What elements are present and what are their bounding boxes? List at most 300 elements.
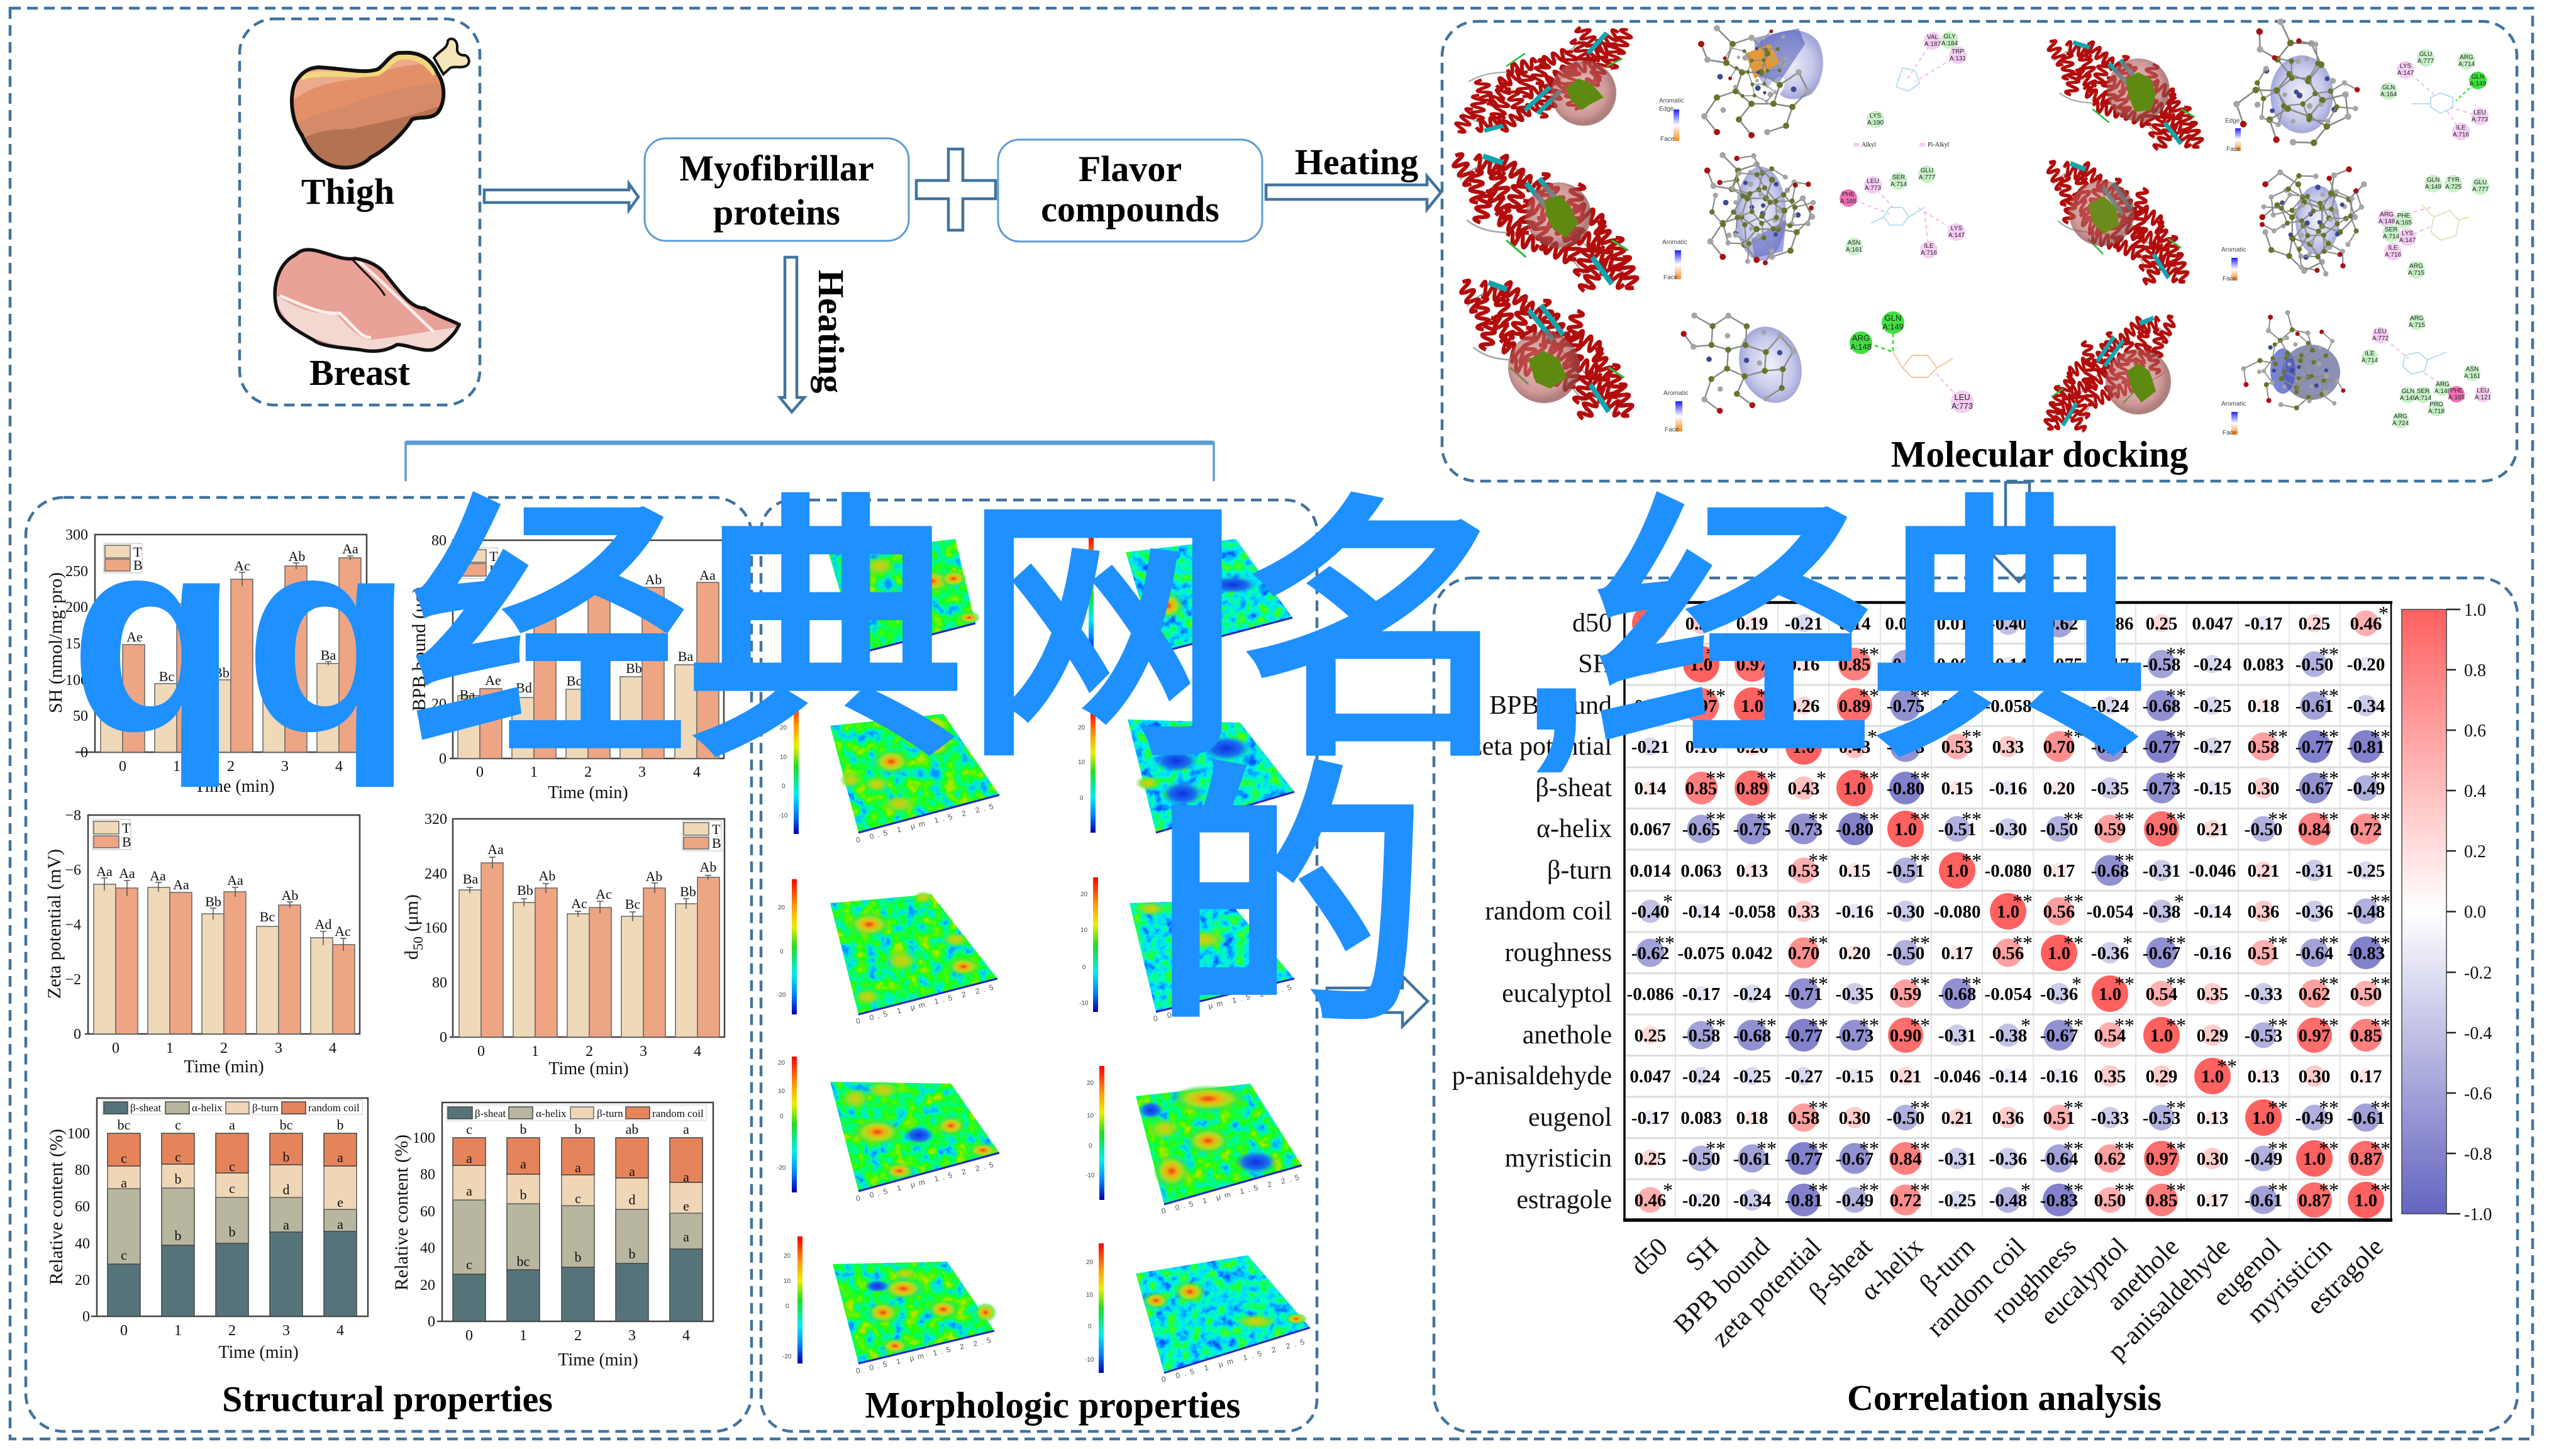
chart: breast secondary structure: 2 bbox=[574, 1328, 582, 1344]
correlation matrix: 1.0 bbox=[1792, 737, 1815, 757]
colour bar legend: 0.6 bbox=[2464, 721, 2486, 741]
correlation matrix: -0.058 bbox=[1985, 696, 2031, 716]
chart: BPB bound: Bb bbox=[626, 660, 642, 676]
correlation matrix: 0.53 bbox=[1941, 737, 1973, 757]
correlation matrix: 0.62 bbox=[2299, 984, 2330, 1004]
correlation matrix: 0.047 bbox=[2192, 614, 2233, 634]
correlation matrix: 0.97 bbox=[2299, 1026, 2330, 1046]
correlation matrix: ** bbox=[2370, 890, 2390, 913]
chart: d50: 240 bbox=[425, 866, 447, 882]
correlation matrix: ** bbox=[2319, 725, 2339, 748]
chart: zeta potential: Bc bbox=[260, 909, 275, 924]
correlation matrix: -0.48 bbox=[1989, 1191, 2027, 1211]
column labels: myristicin bbox=[2241, 1233, 2338, 1329]
colour scales: -20 bbox=[777, 992, 786, 999]
chart: thigh secondary structure: 4 bbox=[336, 1323, 344, 1339]
chart: thigh secondary structure: 3 bbox=[282, 1323, 290, 1339]
correlation matrix: -0.64 bbox=[2040, 1149, 2078, 1169]
2D interaction diagrams: A:131 bbox=[1950, 55, 1967, 62]
correlation matrix: 0.54 bbox=[2146, 984, 2177, 1004]
correlation matrix: ** bbox=[1808, 1179, 1828, 1201]
correlation matrix: ** bbox=[1808, 931, 1828, 954]
2D interaction diagrams: A:718 bbox=[2428, 408, 2445, 415]
chart: SH: 250 bbox=[65, 564, 88, 580]
icon: chicken breast bbox=[275, 250, 459, 351]
correlation matrix: -0.17 bbox=[2091, 655, 2129, 675]
chart: breast secondary structure: α-helix bbox=[536, 1108, 567, 1119]
2D interaction diagrams: ARG bbox=[2436, 381, 2450, 388]
correlation matrix: -0.68 bbox=[1733, 1026, 1771, 1046]
correlation matrix: -0.49 bbox=[2245, 1149, 2282, 1169]
surface: row 1 right bbox=[1126, 539, 1292, 653]
correlation matrix: ** bbox=[2063, 1137, 2084, 1160]
correlation matrix: 1.0 bbox=[1997, 902, 2019, 922]
correlation matrix: * bbox=[2123, 931, 2133, 954]
correlation matrix: 1.0 bbox=[2355, 1191, 2377, 1211]
correlation matrix: ** bbox=[1859, 643, 1879, 665]
correlation matrix: -0.77 bbox=[1785, 1149, 1823, 1169]
correlation matrix: -0.16 bbox=[2194, 943, 2231, 963]
chart: breast secondary structure: random coil bbox=[652, 1108, 704, 1119]
2D interaction diagrams: A:164 bbox=[2380, 91, 2397, 98]
correlation matrix: -0.14 bbox=[2194, 902, 2231, 922]
chart: zeta potential: Aa bbox=[96, 863, 113, 879]
surface: row 1 left bbox=[829, 539, 980, 653]
correlation matrix: -0.30 bbox=[1989, 819, 2027, 840]
2D interaction diagrams: ILE bbox=[2456, 125, 2466, 131]
correlation matrix: -0.73 bbox=[1836, 1026, 1874, 1046]
correlation matrix: -0.33 bbox=[2245, 984, 2282, 1004]
box: myofibrillar proteins: Myofibrillar bbox=[679, 148, 874, 189]
chart: thigh secondary structure: e bbox=[337, 1194, 343, 1210]
correlation matrix: -0.38 bbox=[1989, 1026, 2027, 1046]
correlation matrix: -0.75 bbox=[1733, 819, 1771, 840]
box: myofibrillar proteins: proteins bbox=[713, 192, 840, 233]
colour bar legend: 0.8 bbox=[2464, 661, 2486, 680]
correlation matrix: ** bbox=[1962, 972, 1982, 995]
correlation matrix: -0.24 bbox=[2194, 655, 2231, 675]
correlation matrix: -0.51 bbox=[1887, 861, 1924, 881]
correlation matrix: * bbox=[1867, 725, 1877, 748]
correlation matrix: ** bbox=[2012, 890, 2033, 913]
chart: BPB bound: Bd bbox=[516, 680, 532, 696]
colour scales: 0 bbox=[782, 783, 786, 790]
correlation matrix: 0.21 bbox=[2248, 861, 2279, 881]
chart: zeta potential: Bb bbox=[205, 894, 221, 909]
correlation matrix: 0.17 bbox=[2043, 861, 2075, 881]
2D interaction diagrams: SER bbox=[2417, 388, 2429, 395]
correlation matrix: ** bbox=[2166, 972, 2186, 995]
bracket bbox=[406, 443, 1214, 481]
2D interaction diagrams: GLN bbox=[2402, 388, 2414, 395]
colour scales: 0 bbox=[1082, 964, 1086, 971]
correlation matrix: ** bbox=[2114, 972, 2135, 995]
correlation matrix: ** bbox=[1910, 684, 1930, 707]
chart: d50: Bc bbox=[625, 896, 640, 912]
2D interaction diagrams bbox=[1840, 31, 2492, 428]
correlation matrix: ** bbox=[2319, 643, 2339, 665]
correlation matrix: 0.35 bbox=[2197, 984, 2228, 1004]
correlation matrix: 1.0 bbox=[1741, 696, 1763, 716]
correlation matrix: 0.90 bbox=[2146, 819, 2177, 840]
correlation matrix: -0.075 bbox=[2036, 655, 2082, 675]
arrow: heating to docking: Heating bbox=[1295, 142, 1418, 182]
colour scales: 20 bbox=[1078, 724, 1085, 731]
2D interaction diagrams: PHE bbox=[1842, 191, 1855, 198]
correlation matrix: * bbox=[2021, 1014, 2031, 1036]
aromatic legends: Face bbox=[2223, 275, 2237, 282]
chart: thigh secondary structure: b bbox=[175, 1171, 181, 1187]
correlation matrix: -0.81 bbox=[2347, 737, 2385, 757]
chart: BPB bound: Ba bbox=[678, 648, 693, 664]
correlation matrix: 0.46 bbox=[2350, 614, 2382, 634]
correlation matrix: ** bbox=[1706, 1137, 1726, 1160]
ligand surface molecules bbox=[1676, 12, 2378, 426]
chart: thigh secondary structure: random coil bbox=[308, 1102, 360, 1114]
correlation matrix: 0.72 bbox=[1890, 1191, 1921, 1211]
watermark overlay: 经典网名,经典 bbox=[411, 480, 2148, 789]
correlation matrix: 0.19 bbox=[1635, 696, 1666, 716]
chart: zeta potential: Ac bbox=[335, 923, 351, 939]
correlation matrix: 0.89 bbox=[1736, 779, 1768, 799]
correlation matrix: ** bbox=[2319, 1137, 2339, 1160]
colour scales: 20 bbox=[780, 724, 787, 731]
chart: breast secondary structure: e bbox=[683, 1198, 689, 1214]
column labels: α-helix bbox=[1855, 1233, 1929, 1306]
correlation matrix: 0.36 bbox=[2248, 902, 2279, 922]
colour scales: 0 bbox=[1088, 1323, 1092, 1330]
correlation matrix: -0.20 bbox=[2347, 655, 2385, 675]
box: flavor compounds bbox=[998, 140, 1262, 242]
correlation matrix: -0.50 bbox=[2296, 655, 2333, 675]
correlation matrix: ** bbox=[1757, 643, 1777, 665]
chart: SH: 4 bbox=[335, 758, 343, 775]
chart: BPB bound: Ab bbox=[645, 572, 662, 587]
correlation matrix: ** bbox=[1962, 808, 1982, 830]
row labels bbox=[1452, 609, 1612, 1214]
correlation matrix: -0.61 bbox=[2296, 696, 2333, 716]
correlation matrix: -0.83 bbox=[2347, 943, 2385, 963]
correlation matrix: -0.15 bbox=[2194, 779, 2231, 799]
box: myofibrillar proteins bbox=[645, 138, 909, 241]
aromatic legends: Face bbox=[2223, 430, 2237, 436]
surface: row 3 right: 0 0.5 1 μm 1.5 2 2.5 bbox=[1153, 983, 1292, 1023]
correlation matrix: ** bbox=[1859, 1014, 1879, 1036]
correlation matrix: ** bbox=[2114, 1179, 2135, 1201]
correlation matrix: ** bbox=[1910, 849, 1930, 872]
aromatic legends: Edge bbox=[2225, 118, 2240, 125]
protein structures bbox=[1450, 25, 2204, 435]
correlation matrix: ** bbox=[1808, 972, 1828, 995]
correlation matrix: -0.24 bbox=[1682, 1067, 1720, 1087]
correlation matrix: 0.50 bbox=[2350, 984, 2382, 1004]
correlation matrix: 0.85 bbox=[2350, 1026, 2382, 1046]
row labels: roughness bbox=[1505, 938, 1612, 967]
correlation matrix: 1.0 bbox=[2201, 1067, 2224, 1087]
arrow: docking to correlation bbox=[1991, 482, 2045, 582]
column labels: SH bbox=[1680, 1233, 1724, 1277]
correlation matrix: * bbox=[2021, 602, 2031, 625]
correlation matrix: -0.080 bbox=[1985, 861, 2031, 881]
aromatic legends: Face bbox=[1663, 274, 1678, 281]
surface: row 5 left: 0 0.5 1 μm 1.5 2 2.5 bbox=[855, 1336, 992, 1375]
colour scales: 10 bbox=[778, 1088, 786, 1095]
correlation matrix: ** bbox=[2063, 602, 2084, 625]
chart: breast secondary structure: 60 bbox=[420, 1204, 435, 1220]
correlation matrix: -0.49 bbox=[2347, 779, 2385, 799]
chart: thigh secondary structure: bc bbox=[280, 1117, 293, 1133]
correlation matrix: -0.31 bbox=[2143, 861, 2180, 881]
chart: d50: T bbox=[712, 821, 721, 837]
correlation matrix: ** bbox=[1962, 849, 1982, 872]
correlation matrix: -0.30 bbox=[1887, 902, 1924, 922]
chart: BPB bound: Ac bbox=[536, 596, 553, 612]
surface: row 3 left: 0 0.5 1 μm 1.5 2 2.5 bbox=[855, 983, 994, 1026]
correlation matrix: 1.0 bbox=[1639, 614, 1662, 634]
chart: breast secondary structure: 0 bbox=[465, 1328, 473, 1344]
2D interaction diagrams: ASN bbox=[1848, 240, 1860, 247]
2D interaction diagrams: A:716 bbox=[2385, 252, 2402, 258]
correlation matrix: ** bbox=[2319, 767, 2339, 789]
colour scales: 10 bbox=[784, 1278, 791, 1285]
correlation matrix: ** bbox=[2166, 684, 2186, 707]
chart: d50: Aa bbox=[487, 841, 504, 857]
correlation matrix: ** bbox=[2114, 725, 2135, 748]
2D interaction diagrams: A:773 bbox=[1865, 185, 1882, 192]
correlation matrix: -0.61 bbox=[2347, 1108, 2385, 1128]
2D interaction diagrams: A:190 bbox=[1867, 119, 1884, 126]
correlation matrix: ** bbox=[1757, 808, 1777, 830]
chart: thigh secondary structure: 20 bbox=[75, 1272, 90, 1289]
chart: thigh secondary structure: b bbox=[283, 1149, 289, 1165]
correlation matrix: 0.14 bbox=[1839, 614, 1870, 634]
correlation matrix: ** bbox=[1808, 1137, 1828, 1160]
chart: zeta potential bbox=[44, 808, 360, 1077]
correlation matrix: -0.25 bbox=[1938, 1191, 1976, 1211]
chart: breast secondary structure: β-sheat bbox=[475, 1108, 506, 1119]
2D interaction diagrams: A:716 bbox=[1921, 250, 1938, 257]
correlation matrix: ** bbox=[1655, 931, 1675, 954]
chart: SH: 1 bbox=[173, 758, 180, 775]
chart: thigh secondary structure: 40 bbox=[75, 1236, 90, 1252]
correlation matrix: 0.36 bbox=[1992, 1108, 2024, 1128]
colour scales: 10 bbox=[780, 754, 787, 761]
2D interaction diagrams: LEU bbox=[1867, 178, 1879, 185]
chart: breast secondary structure: 0 bbox=[428, 1314, 435, 1330]
correlation matrix: ** bbox=[2166, 1137, 2186, 1160]
correlation matrix: ** bbox=[2268, 1096, 2288, 1119]
correlation matrix: ** bbox=[2114, 808, 2135, 830]
2D interaction diagrams: A:147 bbox=[2397, 70, 2414, 77]
row labels: eugenol bbox=[1528, 1103, 1612, 1132]
chart: SH: 300 bbox=[65, 527, 88, 543]
correlation matrix: -0.27 bbox=[2194, 737, 2231, 757]
aromatic legends bbox=[1659, 97, 2246, 436]
chart: SH: Ba bbox=[321, 647, 336, 663]
correlation matrix: -0.65 bbox=[1887, 655, 1924, 675]
aromatic legends: Aromatic bbox=[2221, 247, 2246, 253]
column labels: eucalyptol bbox=[2035, 1233, 2133, 1331]
2D interaction diagrams: ARG bbox=[2380, 211, 2394, 218]
chart: BPB bound: B bbox=[489, 562, 499, 578]
correlation matrix: 0.97 bbox=[2146, 1149, 2177, 1169]
correlation matrix: -0.50 bbox=[1887, 1108, 1924, 1128]
correlation matrix: -0.34 bbox=[1733, 1191, 1771, 1211]
correlation matrix: 0.85 bbox=[1839, 655, 1870, 675]
arrow: heating downward: Heating bbox=[811, 270, 852, 393]
chart: BPB bound: Ae bbox=[485, 672, 501, 688]
panel: molecular docking bbox=[1442, 12, 2517, 481]
chart: zeta potential: Aa bbox=[150, 868, 166, 884]
2D interaction diagrams: A:715 bbox=[2409, 322, 2426, 329]
2D interaction diagrams: GLN bbox=[2382, 84, 2395, 91]
2D interaction diagrams: SER bbox=[2385, 226, 2397, 233]
surface: row 4 right bbox=[1136, 1084, 1302, 1216]
correlation matrix: ** bbox=[1910, 1096, 1930, 1119]
2D interaction diagrams: A:714 bbox=[2458, 61, 2475, 68]
aromatic legends: Face bbox=[1665, 426, 1679, 433]
chart: zeta potential: B bbox=[122, 834, 131, 850]
chart: thigh secondary structure: c bbox=[175, 1149, 181, 1165]
colour scales: 20 bbox=[1080, 891, 1088, 898]
correlation matrix: 1.0 bbox=[1843, 779, 1866, 799]
correlation matrix: -0.71 bbox=[2091, 737, 2129, 757]
2D interaction diagrams: A:149 bbox=[2425, 184, 2442, 191]
correlation matrix: ** bbox=[2370, 808, 2390, 830]
chart: breast secondary structure: a bbox=[575, 1160, 581, 1175]
column labels: eugenol bbox=[2207, 1233, 2287, 1312]
colour scales: 10 bbox=[1086, 1292, 1094, 1299]
correlation matrix: ** bbox=[2063, 1179, 2084, 1201]
chart: BPB bound: 1 bbox=[530, 764, 538, 780]
chart: breast secondary structure: 3 bbox=[628, 1328, 636, 1344]
correlation matrix: -0.16 bbox=[1836, 902, 1874, 922]
correlation matrix: 0.56 bbox=[1992, 943, 2024, 963]
correlation matrix: 0.29 bbox=[2146, 1067, 2177, 1087]
chart: breast secondary structure: 80 bbox=[420, 1167, 435, 1183]
chart: BPB bound: Time (min) bbox=[548, 783, 628, 802]
chart: thigh secondary structure: c bbox=[229, 1180, 235, 1196]
chart: BPB bound: 3 bbox=[638, 764, 646, 780]
correlation matrix: 0.16 bbox=[1685, 737, 1717, 757]
column labels: d50 bbox=[1625, 1233, 1674, 1281]
row labels: eucalyptol bbox=[1502, 979, 1612, 1008]
correlation matrix: -0.31 bbox=[2296, 861, 2333, 881]
2D interaction diagrams: PHE bbox=[2450, 387, 2463, 394]
correlation matrix: 0.13 bbox=[1736, 861, 1768, 881]
correlation matrix: -0.33 bbox=[2091, 1108, 2129, 1128]
arrow: meat to proteins bbox=[484, 184, 638, 210]
chart: thigh secondary structure: a bbox=[337, 1216, 343, 1232]
correlation matrix: ** bbox=[1808, 1096, 1828, 1119]
correlation matrix: -0.24 bbox=[1733, 984, 1771, 1004]
correlation matrix: 0.59 bbox=[1890, 984, 1921, 1004]
surface: row 4 left bbox=[830, 1080, 999, 1203]
correlation matrix: ** bbox=[1859, 767, 1879, 789]
2D interaction diagrams: ARG bbox=[2460, 54, 2473, 61]
chart: breast secondary structure: b bbox=[519, 1121, 527, 1137]
2D interaction diagrams: A:148 bbox=[1850, 342, 1872, 352]
chart: d50: 0 bbox=[477, 1043, 485, 1060]
2D interaction diagrams: GLU bbox=[2419, 51, 2432, 58]
colour scales: 0 bbox=[780, 1113, 784, 1120]
correlation matrix: -0.36 bbox=[2040, 984, 2078, 1004]
chart: zeta potential: −8 bbox=[65, 808, 81, 824]
correlation matrix: * bbox=[1816, 767, 1826, 789]
correlation matrix: ** bbox=[2166, 767, 2186, 789]
chart: thigh secondary structure: bc bbox=[118, 1117, 131, 1133]
correlation matrix: -0.67 bbox=[2143, 943, 2180, 963]
correlation matrix: 0.85 bbox=[2146, 1191, 2177, 1211]
chart: d50: Ab bbox=[539, 868, 555, 884]
chart: thigh secondary structure: a bbox=[337, 1150, 343, 1165]
correlation matrix: -0.53 bbox=[2245, 1026, 2282, 1046]
chart: breast secondary structure: a bbox=[683, 1169, 689, 1185]
chart: BPB bound: Ab bbox=[591, 575, 608, 591]
correlation matrix: 1.0 bbox=[1690, 655, 1713, 675]
correlation matrix: 0.21 bbox=[1941, 1108, 1973, 1128]
colour scales: 20 bbox=[784, 1253, 791, 1260]
chart: thigh secondary structure: c bbox=[121, 1247, 127, 1263]
correlation matrix: -0.75 bbox=[1887, 696, 1924, 716]
chart: breast secondary structure: 1 bbox=[519, 1328, 527, 1344]
surface: row 2 left: 0 0.5 1 μm 1.5 2 2.5 bbox=[855, 802, 994, 845]
chart: zeta potential: Time (min) bbox=[184, 1057, 264, 1077]
correlation matrix: ** bbox=[1757, 1014, 1777, 1036]
correlation matrix: ** bbox=[2319, 931, 2339, 954]
correlation matrix: ** bbox=[2370, 767, 2390, 789]
correlation matrix: 0.36 bbox=[1685, 614, 1717, 634]
correlation matrix: 0.87 bbox=[2299, 1191, 2330, 1211]
chart: SH: 200 bbox=[65, 599, 88, 616]
correlation matrix: -0.35 bbox=[2091, 779, 2129, 799]
colour scales: 0 bbox=[1089, 1143, 1092, 1150]
correlation matrix: -0.17 bbox=[1631, 1108, 1669, 1128]
correlation matrix: -0.21 bbox=[1785, 614, 1823, 634]
chart: BPB bound bbox=[409, 533, 724, 802]
correlation matrix: ** bbox=[2319, 1179, 2339, 1201]
correlation matrix: 0.25 bbox=[1635, 1149, 1666, 1169]
correlation matrix: ** bbox=[2166, 931, 2186, 954]
correlation matrix: ** bbox=[1910, 931, 1930, 954]
correlation matrix: 0.17 bbox=[2197, 1191, 2228, 1211]
2D interaction diagrams: GLN bbox=[2427, 177, 2440, 184]
correlation matrix: ** bbox=[2268, 931, 2288, 954]
2D interaction diagrams: TRP bbox=[1951, 48, 1964, 55]
correlation matrix: 0.014 bbox=[1936, 614, 1978, 634]
icon: plus bbox=[916, 149, 996, 230]
2D interaction diagrams: A:165 bbox=[2396, 219, 2412, 226]
chart: d50: Ac bbox=[571, 896, 587, 911]
chart: d50: Bb bbox=[680, 884, 696, 899]
column labels: random coil bbox=[1921, 1233, 2031, 1343]
chart: breast secondary structure: a bbox=[466, 1150, 472, 1166]
correlation matrix: 0.30 bbox=[1839, 1108, 1870, 1128]
correlation matrix: ** bbox=[2319, 1014, 2339, 1036]
correlation matrix: -0.77 bbox=[1785, 1026, 1823, 1046]
2D interaction diagrams: A:715 bbox=[2408, 270, 2425, 277]
correlation matrix: -0.20 bbox=[1682, 1191, 1720, 1211]
chart: BPB bound: 60 bbox=[431, 587, 447, 604]
chart: thigh secondary structure: β-turn bbox=[252, 1102, 279, 1114]
correlation matrix: ** bbox=[1757, 767, 1777, 789]
chart: zeta potential: Ab bbox=[282, 887, 298, 903]
correlation matrix: 0.14 bbox=[1635, 779, 1666, 799]
colour scales: 20 bbox=[1087, 1080, 1094, 1087]
chart: thigh secondary structure: b bbox=[229, 1224, 235, 1240]
chart: breast secondary structure: a bbox=[683, 1121, 689, 1137]
correlation matrix: ** bbox=[2063, 725, 2084, 748]
